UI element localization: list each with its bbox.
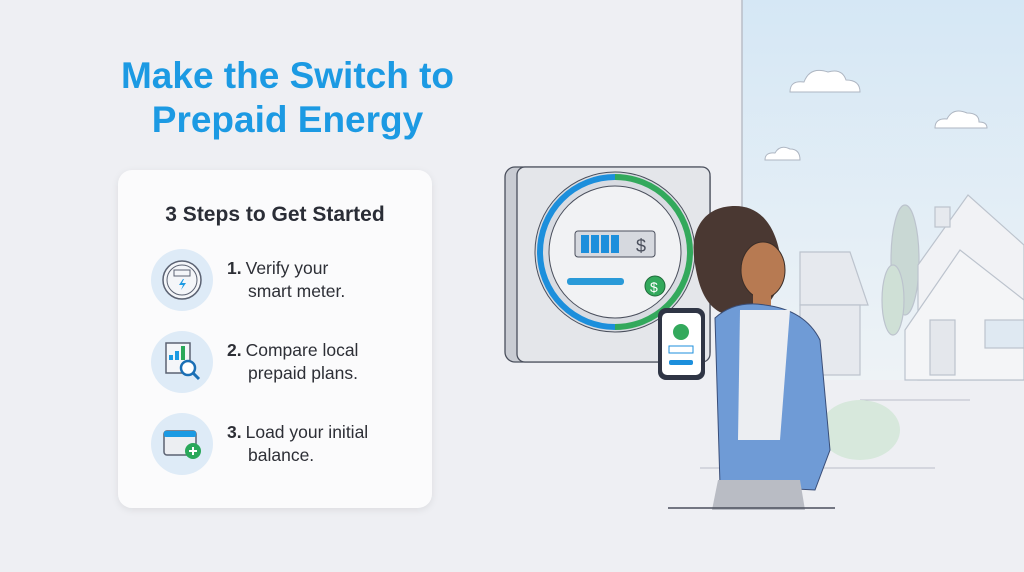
step 1: smart meter. xyxy=(248,281,345,301)
heading: 3 Steps to Get Started xyxy=(165,203,385,226)
step 1 xyxy=(151,249,345,311)
title: Prepaid Energy xyxy=(152,99,423,140)
illustration: smart meter: $ xyxy=(650,279,658,295)
panel: steps card xyxy=(118,170,432,508)
illustration: smart meter: $ xyxy=(636,236,646,256)
step 3: balance. xyxy=(248,445,314,465)
step 3 xyxy=(151,413,368,475)
step 3: 3.Load your initial xyxy=(227,422,368,442)
step 2: prepaid plans. xyxy=(248,363,358,383)
step 2 xyxy=(151,331,358,393)
step 1: 1.Verify your xyxy=(227,258,328,278)
step 2: 2.Compare local xyxy=(227,340,358,360)
title xyxy=(121,55,454,140)
illustration: smart meter xyxy=(504,166,711,363)
title: Make the Switch to xyxy=(121,55,454,96)
illustration: person with phone xyxy=(658,206,835,510)
